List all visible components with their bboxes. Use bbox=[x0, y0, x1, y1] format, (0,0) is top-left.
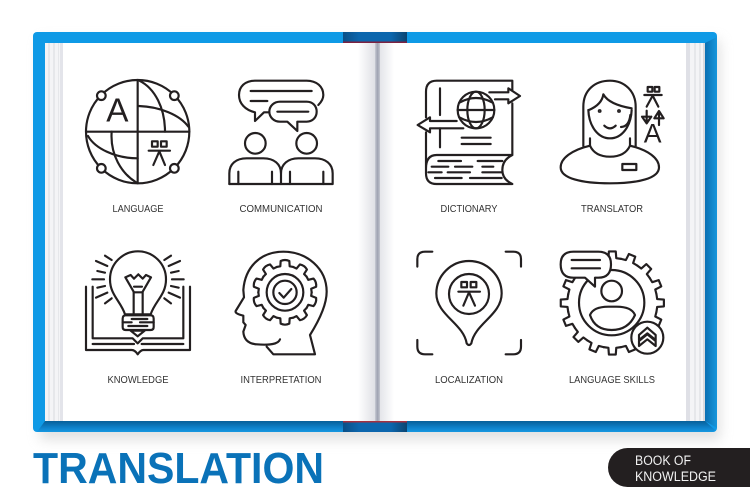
icon: localization pin bbox=[417, 252, 521, 354]
book shadow bbox=[40, 40, 720, 440]
badge: book of knowledge: KNOWLEDGE bbox=[635, 469, 716, 484]
panel: open book bbox=[33, 32, 717, 432]
title: TRANSLATION bbox=[33, 444, 324, 493]
icon: language globe: A bbox=[106, 93, 129, 130]
icon: interpretation head with gear bbox=[236, 252, 327, 354]
spine band top bbox=[343, 32, 407, 43]
icon: translator bbox=[561, 81, 664, 183]
label: language: LANGUAGE bbox=[112, 203, 164, 215]
label: language skills: LANGUAGE SKILLS bbox=[569, 374, 655, 386]
label: knowledge: KNOWLEDGE bbox=[108, 374, 168, 386]
left page bbox=[45, 43, 376, 421]
spine band bottom bbox=[343, 421, 407, 432]
label: dictionary: DICTIONARY bbox=[440, 203, 498, 215]
icon: translator: A bbox=[644, 118, 662, 148]
badge: book of knowledge: BOOK OF bbox=[635, 453, 691, 468]
icon: language globe bbox=[86, 80, 189, 183]
label: communication: COMMUNICATION bbox=[240, 203, 322, 215]
badge: book of knowledge bbox=[608, 448, 750, 487]
icon: communication bbox=[229, 81, 333, 184]
label: localization: LOCALIZATION bbox=[435, 374, 503, 386]
book cover bbox=[33, 32, 717, 432]
label: interpretation: INTERPRETATION bbox=[240, 374, 322, 386]
icon: language skills gear bbox=[561, 251, 664, 355]
right page bbox=[375, 43, 705, 421]
icon: knowledge bulb and book bbox=[86, 251, 190, 354]
icon: dictionary bbox=[418, 81, 520, 184]
label: translator: TRANSLATOR bbox=[581, 203, 643, 215]
